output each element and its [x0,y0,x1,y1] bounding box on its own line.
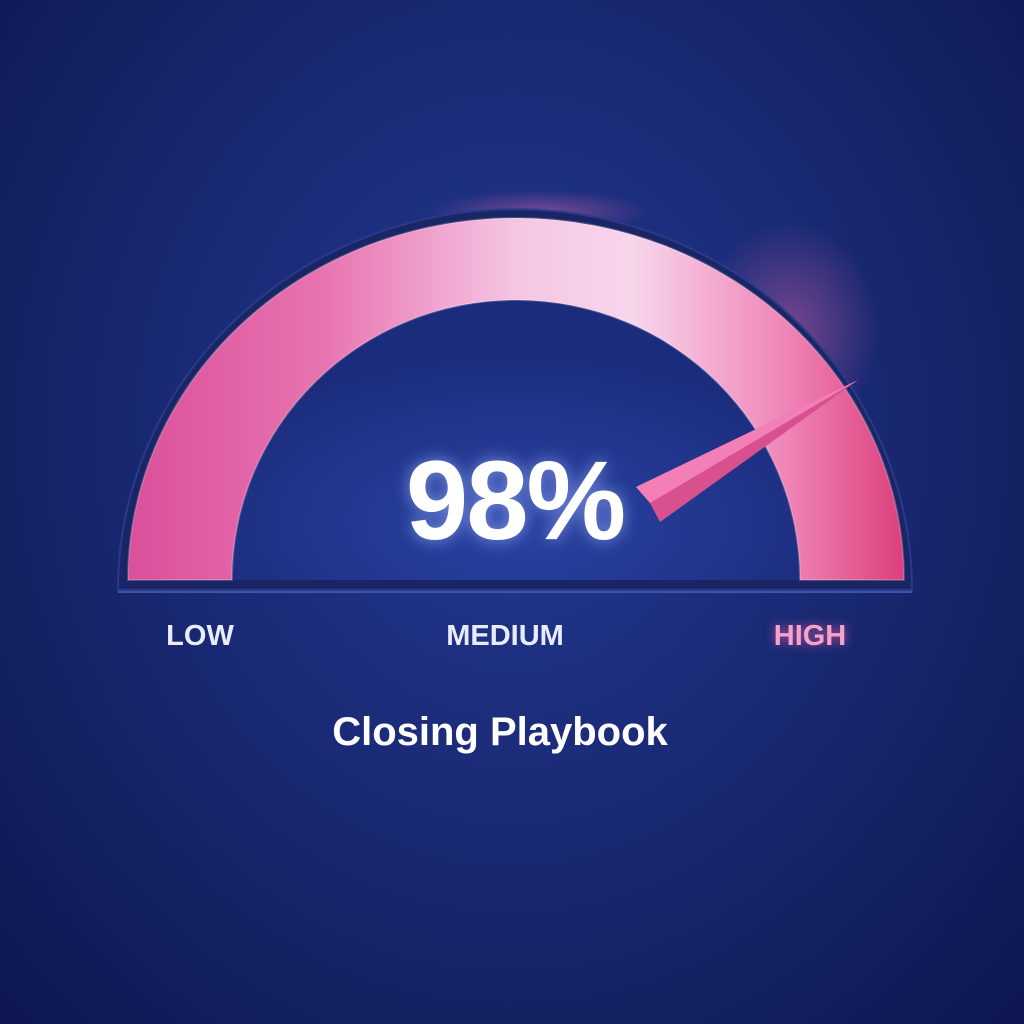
label MEDIUM: MEDIUM [446,620,564,652]
label LOW: LOW [166,620,234,652]
label HIGH: HIGH [774,620,846,652]
needle [636,380,858,522]
gauge arc [128,218,904,580]
title: Closing Playbook [332,710,668,754]
gauge backing plate [118,209,912,590]
value 98%: 98% [406,438,624,563]
